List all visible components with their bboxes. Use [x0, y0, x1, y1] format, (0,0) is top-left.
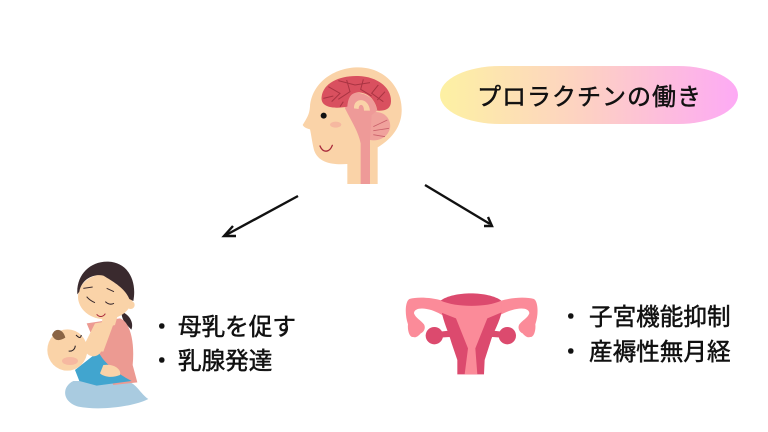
- text block: breast effects: [150, 314, 296, 375]
- icon: mother breastfeeding baby: [47, 262, 148, 408]
- arrow: to uterus: [425, 185, 492, 226]
- mother body: [87, 318, 137, 385]
- baby head: [47, 329, 87, 371]
- text block: breast effects: ・: [150, 349, 174, 375]
- cerebellum: [370, 112, 390, 140]
- title pill: プロラクチンの働き: [477, 84, 701, 111]
- hair: [77, 262, 134, 301]
- inner arch: [354, 100, 370, 111]
- text block: breast effects: 乳腺発達: [178, 348, 272, 375]
- icon: head with brain: [303, 67, 402, 184]
- brainstem and spinal cord: [345, 93, 377, 184]
- baby clothes: [75, 352, 132, 386]
- chest: [82, 320, 115, 352]
- text block: uterus effects: ・: [559, 305, 583, 331]
- text block: uterus effects: [559, 304, 731, 366]
- cerebrum: [322, 76, 391, 111]
- title pill: [440, 66, 738, 124]
- neck and head: [102, 313, 118, 326]
- uterus wall: [442, 312, 502, 374]
- face details: [321, 113, 327, 119]
- uterus top: [441, 293, 501, 306]
- text block: breast effects: ・: [150, 315, 174, 341]
- hair bun: [122, 312, 132, 330]
- mother face: [83, 287, 114, 304]
- mother breast and hand: [85, 339, 102, 356]
- icon: uterus: [406, 293, 538, 374]
- text block: uterus effects: 産褥性無月経: [589, 339, 731, 366]
- arrow: to breastfeeding: [224, 196, 298, 236]
- ovaries: [440, 330, 502, 338]
- text block: uterus effects: ・: [559, 340, 583, 366]
- uterus cavity: [441, 301, 502, 374]
- fallopian tubes: [406, 298, 538, 337]
- text block: uterus effects: 子宮機能抑制: [589, 304, 731, 331]
- cushion: [65, 381, 148, 408]
- text block: breast effects: 母乳を促す: [178, 314, 296, 341]
